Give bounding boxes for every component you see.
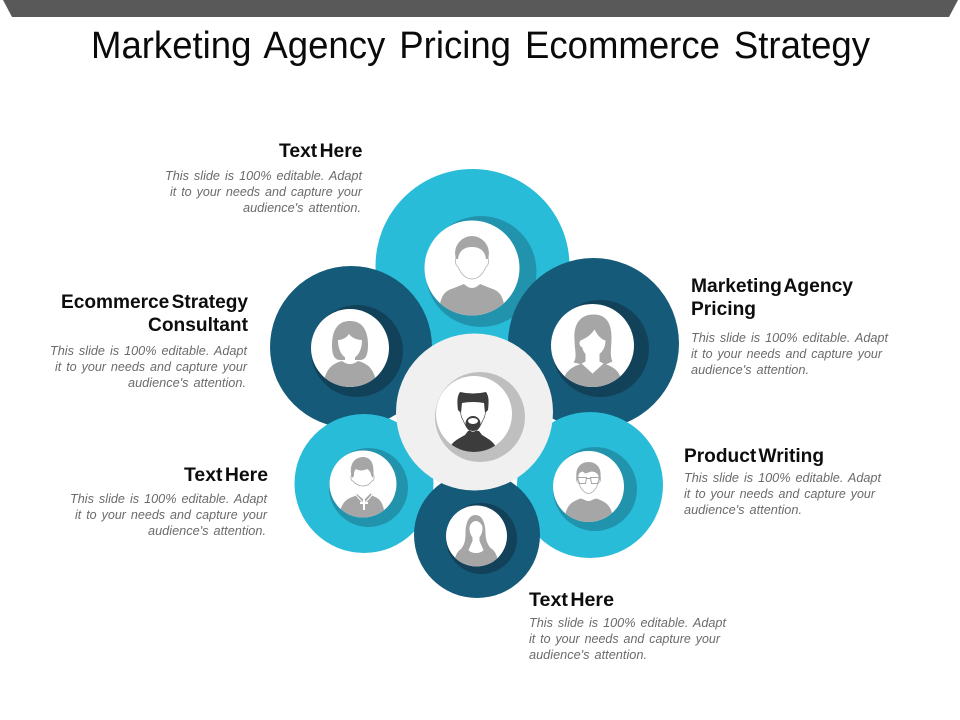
icon: man with cross necklace <box>340 457 384 518</box>
text block: lower left: audience's attention. <box>148 523 266 538</box>
text block: lower left: it to your needs and capture your <box>75 507 268 522</box>
icon: man with glasses <box>566 462 612 522</box>
text block: marketing agency pricing: This slide is 100% editable. Adapt <box>691 330 889 345</box>
text block: top <box>165 140 363 215</box>
text block: ecommerce strategy consultant <box>50 291 248 390</box>
text block: marketing agency pricing <box>691 275 889 377</box>
text block: lower left <box>70 464 268 538</box>
text block: bottom: audience's attention. <box>529 647 647 662</box>
text block: ecommerce strategy consultant: This slide is 100% editable. Adapt <box>50 343 248 358</box>
text block: ecommerce strategy consultant: Ecommerce Strategy <box>61 291 248 313</box>
top header bar <box>3 0 958 17</box>
title: Marketing Agency Pricing Ecommerce Strategy <box>91 25 870 67</box>
text block: product writing: Product Writing <box>684 445 824 467</box>
text block: marketing agency pricing: Pricing <box>691 298 756 320</box>
text block: top: it to your needs and capture your <box>170 184 363 199</box>
text block: ecommerce strategy consultant: Consultant <box>148 314 248 336</box>
text block: bottom: Text Here <box>529 589 614 611</box>
text block: top: This slide is 100% editable. Adapt <box>165 168 363 183</box>
text block: marketing agency pricing: audience's attention. <box>691 362 809 377</box>
icon: bearded man <box>452 392 495 452</box>
icon: woman with bob hair <box>324 321 376 387</box>
text block: top: Text Here <box>279 140 363 162</box>
panel: left dark ring <box>270 266 432 428</box>
panel: lower left cyan ring <box>294 414 434 553</box>
text block: marketing agency pricing: Marketing Agency <box>691 275 853 297</box>
icon: woman with straight long hair <box>455 515 498 566</box>
text block: lower left: Text Here <box>184 464 268 486</box>
icon: man with short hair <box>439 236 505 318</box>
text block: marketing agency pricing: it to your needs and capture your <box>691 346 883 361</box>
panel: lower right cyan ring <box>517 412 663 558</box>
text block: bottom: This slide is 100% editable. Adapt <box>529 615 727 630</box>
icon: woman with long hair <box>564 314 620 387</box>
text block: product writing: This slide is 100% editable. Adapt <box>684 470 882 485</box>
panel: top cyan ring <box>376 169 570 363</box>
text block: ecommerce strategy consultant: it to your needs and capture your <box>55 359 248 374</box>
text block: lower left: This slide is 100% editable. Adapt <box>70 491 268 506</box>
text block: bottom: it to your needs and capture your <box>529 631 721 646</box>
text block: product writing <box>684 445 882 517</box>
panel: bottom dark ring <box>414 472 540 598</box>
text block: top: audience's attention. <box>243 200 361 215</box>
text block: ecommerce strategy consultant: audience's attention. <box>128 375 246 390</box>
text block: product writing: it to your needs and capture your <box>684 486 876 501</box>
text block: product writing: audience's attention. <box>684 502 802 517</box>
panel: center hub <box>396 334 553 490</box>
panel: right dark ring <box>508 258 679 429</box>
text block: bottom <box>529 589 727 662</box>
